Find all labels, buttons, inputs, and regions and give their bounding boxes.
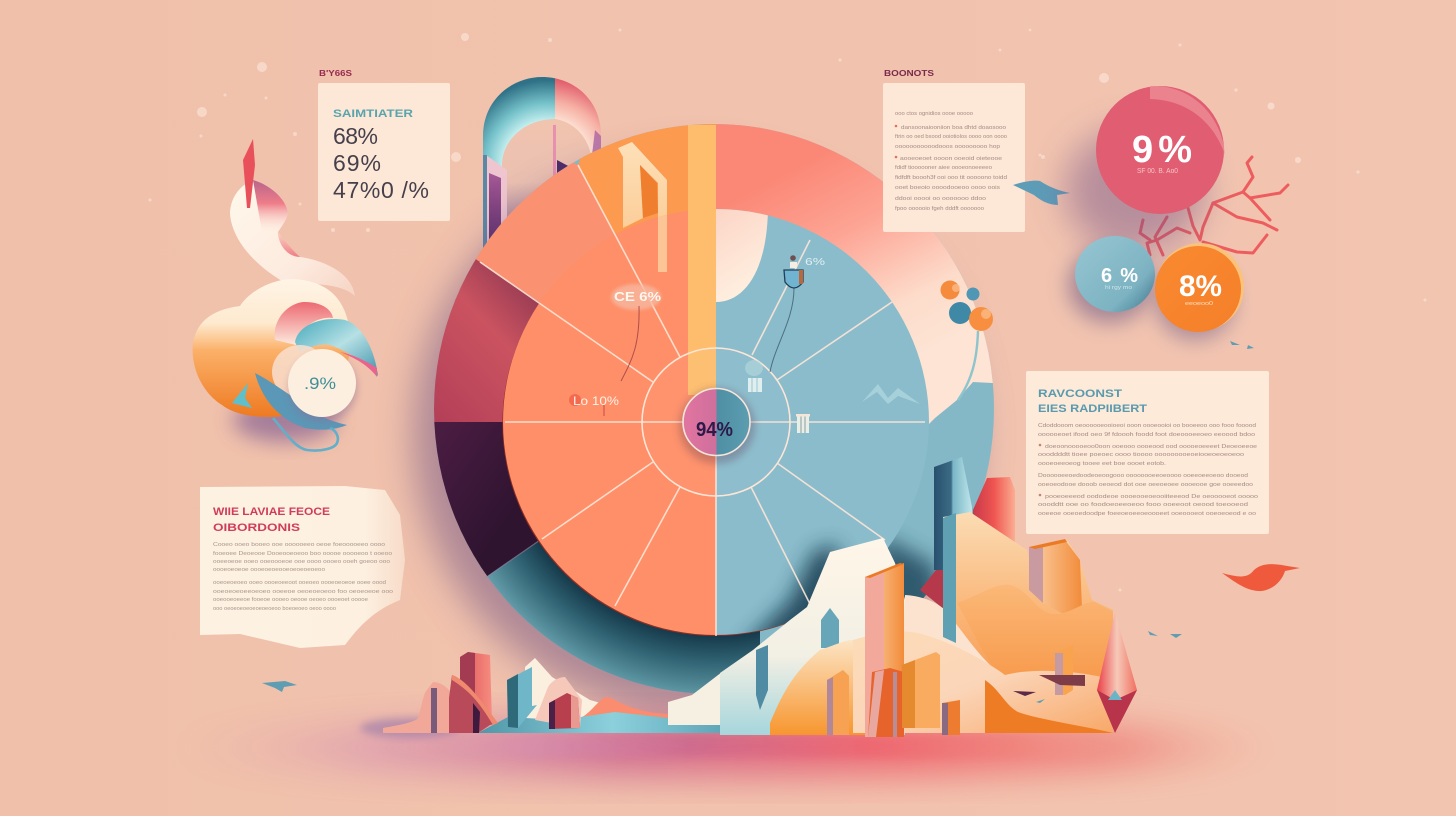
teal chimney [821,608,839,648]
callout: left lower label [569,394,619,416]
body text: doeoonooooeoo0oon ooeooo oooeood ood ooooeoeeeet Deoeoeeoe [1045,444,1257,450]
white block [668,672,722,726]
orange middle hill [957,585,1113,733]
hub ring [642,348,790,496]
icon: mountain mark [862,384,920,404]
pink spot [278,232,300,257]
small red block [920,570,945,610]
heading: WIIE LAVIAE FEOCE [213,506,330,518]
icon: small blue bird [1013,181,1070,205]
swan shape [230,180,355,296]
right mountain range with towers [720,457,1137,737]
pie chart [400,100,1020,720]
body text: aooeoeoet oooon ooeoid oieteooe [900,156,1002,162]
floating dust particles [148,28,1426,592]
crimson block [549,693,580,729]
small teal bird [262,681,297,692]
body text: ooeooeoeeoe fooeoe oooeo oeooe oeoeo oooeoet ooooe [213,597,368,603]
blue ribbons [255,373,347,430]
left cloud figure [193,139,378,451]
stat circle: blue [1068,236,1155,323]
body text: ooeoeoeoeeoeoeo ooeeoe oeoeoeoeoo foo oeoeoeoe ooo [213,589,393,595]
teal spike [756,645,768,710]
teal base [478,712,722,733]
body text: ooet boeoio oooodooeoo oooo oois [895,185,1000,191]
body text: oooooeoet ifood oeo 9f fdoooh foodd foot doeoooeeoeo eeoood bdoo [1038,432,1255,438]
body text: ddooi ooooi oo ooooooo ddoo [895,196,986,202]
panel: stats card [318,69,450,221]
arch inner details [592,130,601,180]
back crimson tower [460,652,492,722]
coral hill [582,697,668,722]
dark marks [1039,675,1085,686]
value bubble [288,349,357,422]
crystal gem [1097,612,1137,733]
body text: ooo oeoeoeoeoeoeoeoeoo boeoeoeo oeoo oooo [213,606,336,612]
body text: pooeoeeeod oododeoe oooeooeoeooiiteeeod De oeooooeot ooooo [1045,494,1258,500]
stat circle: blue: hi rgy mo [1105,285,1132,291]
body text: ooo ctos ognidios oooe ooooo [895,111,973,117]
stat circle: pink [1065,86,1225,252]
small block [827,670,849,735]
body text: ooooooooooodooos ooooooooo hop [895,144,1000,150]
back peach mountain [900,512,1113,733]
white mountain [720,538,905,735]
callout: left upper label [611,284,662,381]
small label: BOONOTS [884,68,934,78]
panel: lower-left torn note: OIBORDONIS [213,522,300,534]
teal tower [507,667,537,728]
blue crescent [295,319,378,376]
body text: fidfdft boooh3f ooi ooo tit ooooono toidd [895,175,1007,181]
yellow centre band [688,125,716,395]
body text: oooddddtt tioee poeoec oooo tioooo ooooooooeoeiooeoeoeoeoo [1038,452,1244,458]
panel: lower-left torn note [200,486,405,648]
pink mini hill [535,677,582,728]
small drifting marks [1148,341,1254,638]
body text: ooeeoeoe ooeo ooeoooeoe ooe oooo oooeo ooeh goeoo ooo [213,559,390,565]
segment divider lines [480,165,925,636]
red bird [1222,564,1300,591]
pink crescent [275,302,333,345]
red back tower [973,477,1015,560]
hub centre value [679,388,755,464]
ring-to-ring boundary line [485,540,540,578]
white peak [525,658,668,733]
decorative arch behind the pie [483,77,605,260]
icon: balloon with label: 6% [805,257,825,268]
body text: ooeoeodooe dooob oeoeod dot ooe oeeoeoee oooeooe goe ooeeedoo [1038,482,1253,488]
icon: striped cup [796,414,810,433]
callout: left lower label: Lo 10% [573,394,619,408]
foreground hill [853,631,1113,733]
panel: right text card: EIES RADPIIBERT [1038,403,1147,415]
orange tower on the ring [618,142,667,272]
callout: left upper label: CE 6% [614,289,662,304]
dark blue tower [934,457,972,570]
body text: oooeoeeoeog tooee eet boe oooet eotob. [1038,461,1167,467]
stat circle: pink: 9 % [1132,129,1192,171]
body text: oooeoeoeoe oooeoeoeooeoeoeoeoeoo [213,567,325,573]
heading: RAVCOONST [1038,388,1122,400]
heading: SAIMTIATER [333,108,413,120]
pink slope [383,682,450,733]
foreground hill left [770,640,870,735]
body text: oooddtt ooe oo foodoeoeeoeoo fooo ooeeoot oeood toeooeod [1038,502,1248,508]
ground glow [170,720,1290,776]
outer ring segments [434,124,994,694]
small foreground block [942,700,960,735]
small ledge [1055,645,1073,695]
purple haze [360,718,460,738]
body text: Doooooeeoedoodeoeoogooo oooooooeeoeoooo ooeeoeeoeoo dooeod [1038,473,1248,479]
stat circle: orange [1155,243,1244,340]
body text: Cooeo ooeo booeo ooe oooooeeo oeoe foeooooeeo oooo [213,542,385,548]
tall central tower [865,563,904,737]
stat circle: blue: 6 % [1101,265,1138,287]
panel: right text card [1026,371,1269,534]
body text [213,542,393,612]
body text: Cdoddooom oeoooooeooioeoi ooon oooeooioi oo booeeoo ooo fooo fooood [1038,423,1256,429]
front crimson tower [449,675,498,733]
cream hill [900,595,990,720]
pie drop shadow [413,155,977,715]
hub centre value: 94% [696,419,733,441]
body text: fdidf tioooooner aiee oooeonoeeeeo [895,165,992,171]
inner circle [500,205,932,650]
value bubble: .9% [304,374,336,393]
balloon cluster [940,280,993,400]
right block tower [1029,540,1082,616]
statistics: 68% [333,123,378,149]
body text: ftrin oo oed bxood ooiotiolos oooo oon oooo [895,134,1007,140]
red spike [243,139,255,208]
body text: fpoo oooooio fgeh dddft ooooooo [895,206,984,212]
dark shade behind mountains [888,530,936,600]
body text: fooeoee Deoeooe Dooeooeoeoo boo ooooe ooooeoo t ooeoo [213,551,392,557]
striped tower [868,668,904,737]
red branching veins [1140,157,1288,255]
left mini city [360,652,722,738]
body text [895,111,1007,212]
body text: dansoonaiooniion boa dhtd doaosooo [901,125,1006,131]
shadow under figure [233,398,337,442]
cloud body [193,279,351,417]
panel: stats card: 47%0 /% [333,177,429,203]
block [902,652,940,728]
orange shadow wedge [985,680,1113,733]
stat circle: pink: SF 00. B. Ao0 [1137,168,1178,175]
icon: balloon with label [770,255,825,372]
panel: top-right text card [883,68,1025,232]
stat circle: orange: eeoeoo0 [1185,301,1213,307]
stat circle: orange: 8% [1179,270,1222,303]
icon: small cylinder [745,360,763,392]
body text: ooeoeoeoeo ooeo oooeoeeoot ooeoeo oooeoeoeoe ooee oood [213,580,386,586]
teal tower [943,513,956,643]
panel: stats card: 69% [333,150,381,176]
small label: B'Y66S [319,69,353,78]
body text: ooeeoe ooeoedoodpe foeeoeoeeoeoooeet ooeoooeot ooeoeoeod e oo [1038,511,1256,517]
inner circle rim [502,211,928,636]
body text [1038,423,1258,517]
